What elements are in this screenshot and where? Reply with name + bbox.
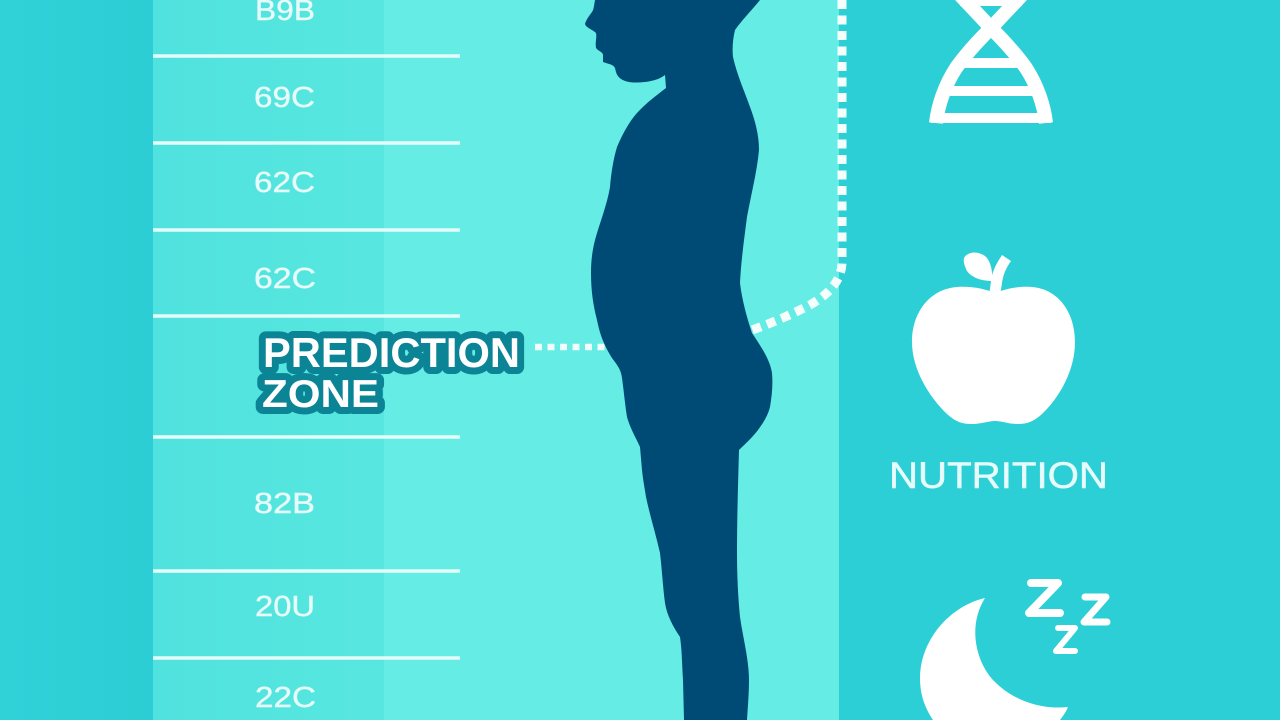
icon: moon and sleep z's	[920, 583, 1107, 720]
ruler labels: 82B	[254, 488, 315, 520]
dotted connector: prediction zone to body	[535, 344, 608, 350]
central panel	[384, 0, 839, 720]
prediction zone callout: PREDICTION	[263, 329, 520, 376]
ruler labels: 20U	[255, 591, 315, 623]
ruler panel	[153, 0, 384, 720]
prediction zone callout: ZONE	[262, 373, 379, 416]
dotted connector: body to right panel	[752, 0, 842, 330]
icon: DNA helix	[931, 0, 1051, 123]
ruler lines	[153, 56, 460, 658]
left margin band	[0, 0, 153, 720]
label: nutrition: NUTRITION	[889, 455, 1108, 496]
ruler labels: 62C	[254, 167, 315, 199]
body silhouette	[585, 0, 772, 720]
ruler labels	[254, 0, 316, 714]
icon: apple	[912, 252, 1075, 424]
ruler labels: 22C	[255, 682, 316, 714]
ruler labels: 69C	[254, 82, 315, 114]
ruler labels: 62C	[254, 263, 316, 295]
prediction zone callout	[262, 329, 520, 416]
